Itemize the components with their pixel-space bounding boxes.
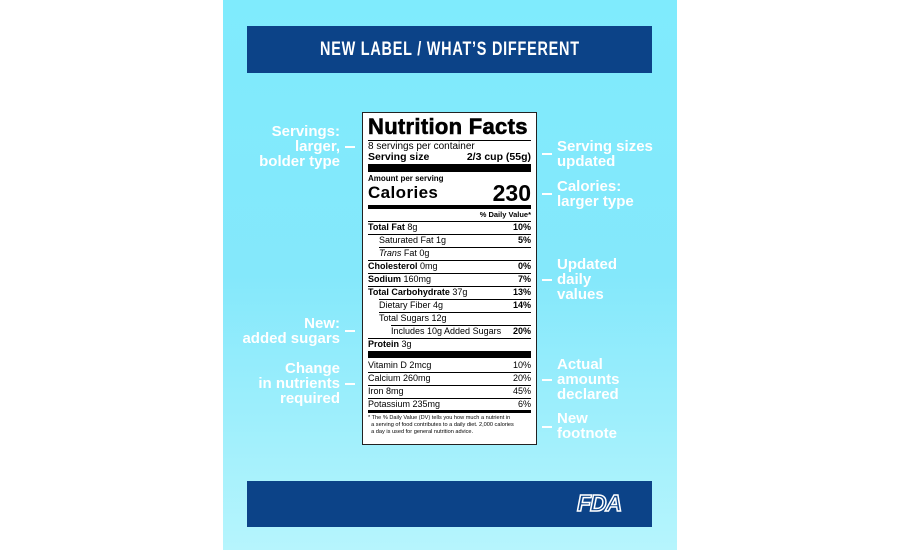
footnote [368, 415, 514, 435]
annotation: footnote [557, 410, 617, 442]
calories: 230 [493, 180, 531, 206]
annotation: nutrients required: Change [285, 360, 340, 377]
annotation: servings: larger, [295, 138, 340, 155]
annotation: actual amounts: Actual [557, 356, 603, 373]
annotation: nutrients required: required [280, 390, 340, 407]
nutrition label: % Daily Value* [480, 210, 531, 219]
nutrition label: Potassium 235mg [368, 399, 440, 409]
nutrition label: 2/3 cup (55g) [467, 151, 531, 163]
nutrition label: Trans Fat 0g [379, 248, 429, 258]
header bar [247, 26, 652, 73]
background panel [223, 0, 677, 550]
nutrition label: Saturated Fat 1g [379, 235, 446, 245]
nutrition label: 0% [518, 261, 531, 271]
annotation: serving sizes [557, 138, 653, 170]
annotation: calories [557, 178, 634, 210]
annotation: serving sizes: updated [557, 153, 615, 170]
annotation: nutrients required: in nutrients [258, 375, 340, 392]
nutrition label: 6% [518, 399, 531, 409]
annotation: serving sizes: Serving sizes [557, 138, 653, 155]
nutrition label: Dietary Fiber 4g [379, 300, 443, 310]
annotation: actual amounts: declared [557, 386, 619, 403]
header bar: NEW LABEL / WHAT’S DIFFERENT [320, 38, 579, 60]
added sugars row: 20% [513, 326, 531, 336]
annotation: calories: Calories: [557, 178, 621, 195]
nutrition label: 20% [513, 373, 531, 383]
nutrition label: 45% [513, 386, 531, 396]
annotation: added sugars [242, 315, 340, 347]
annotation: footnote: footnote [557, 425, 617, 442]
calories [368, 180, 531, 206]
nutrition label: Calcium 260mg [368, 373, 431, 383]
label title: Nutrition Facts [368, 114, 528, 139]
nutrition label: 7% [518, 274, 531, 284]
annotation: daily values: Updated [557, 256, 617, 273]
nutrition label: 14% [513, 300, 531, 310]
nutrition label: Protein 3g [368, 339, 412, 349]
footnote: a day is used for general nutrition advice. [371, 429, 473, 435]
nutrition label: 8 servings per container [368, 141, 475, 152]
footnote: a serving of food contributes to a daily diet. 2,000 calories [371, 422, 514, 428]
annotation: servings [259, 123, 340, 170]
icon: FDA logo: FDA [577, 490, 621, 516]
annotation: nutrients required [258, 360, 340, 407]
nutrition label: 5% [518, 235, 531, 245]
annotation: calories: larger type [557, 193, 634, 210]
nutrition label: 13% [513, 287, 531, 297]
annotation: servings: bolder type [259, 153, 340, 170]
footnote: * The % Daily Value (DV) tells you how much a nutrient in [368, 415, 510, 421]
annotation: actual amounts [557, 356, 620, 403]
footer bar with FDA logo [247, 481, 652, 527]
nutrition label: Vitamin D 2mcg [368, 360, 431, 370]
annotation: added sugars: New: [304, 315, 340, 332]
annotation: footnote: New [557, 410, 588, 427]
annotation: servings: Servings: [272, 123, 340, 140]
nutrition label: 10% [513, 222, 531, 232]
annotation: daily values [557, 256, 617, 303]
annotation: added sugars: added sugars [242, 330, 340, 347]
nutrition label: Cholesterol 0mg [368, 261, 438, 271]
nutrition label: Sodium 160mg [368, 274, 431, 284]
nutrition label: Total Carbohydrate 37g [368, 287, 467, 297]
nutrition label: Total Fat 8g [368, 222, 417, 232]
nutrition label [362, 112, 537, 445]
nutrition label: 10% [513, 360, 531, 370]
nutrition label: Iron 8mg [368, 386, 404, 396]
annotation: daily values: daily [557, 271, 591, 288]
nutrition label: Amount per serving [368, 174, 444, 183]
nutrition label: Serving size [368, 151, 429, 163]
calories: Calories [368, 183, 438, 202]
annotation: daily values: values [557, 286, 604, 303]
nutrition label: Total Sugars 12g [379, 313, 447, 323]
annotation: actual amounts: amounts [557, 371, 620, 388]
added sugars row: Includes 10g Added Sugars [391, 326, 501, 336]
